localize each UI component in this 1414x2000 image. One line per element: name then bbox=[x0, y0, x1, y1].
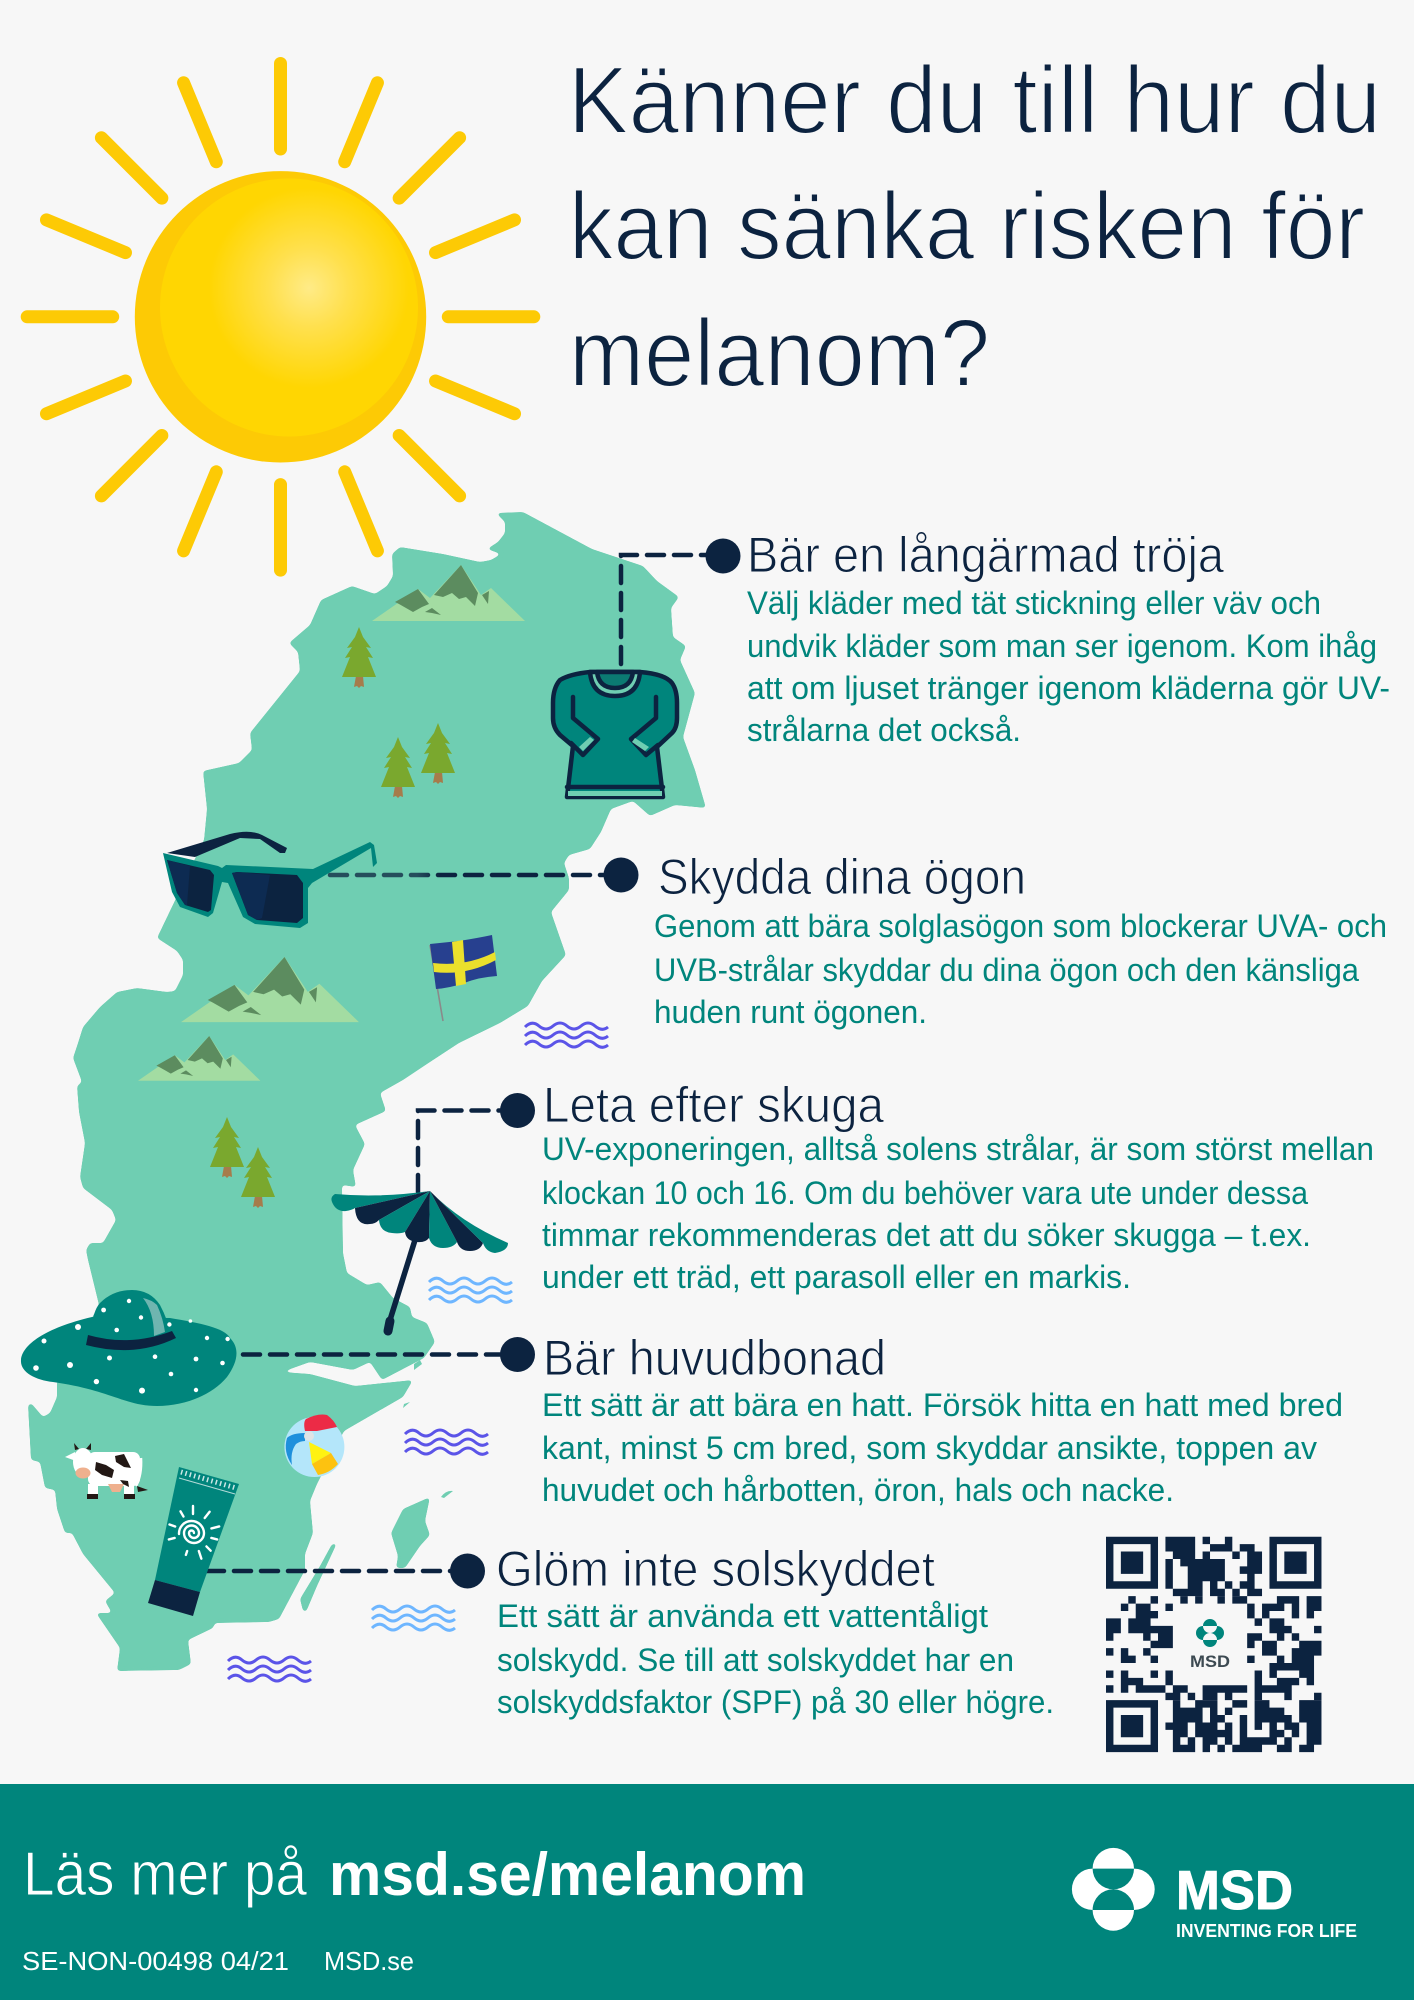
QR code bbox=[1106, 1537, 1321, 1752]
MSD logo bbox=[1072, 1848, 1357, 1941]
tip: seek shade: under ett träd, ett parasoll eller en markis. bbox=[542, 1259, 1131, 1295]
footer call to action bbox=[23, 1840, 806, 1909]
footer reference code: SE-NON-00498 04/21 bbox=[22, 1946, 289, 1976]
footer reference code bbox=[22, 1946, 414, 1976]
icon: cow bbox=[65, 1443, 148, 1499]
tip: seek shade: timmar rekommenderas det att du söker skugga – t.ex. bbox=[542, 1217, 1311, 1253]
icon: parasol bbox=[331, 1191, 508, 1331]
icon: mountains middle bbox=[181, 957, 359, 1022]
map of Sweden bbox=[28, 512, 706, 1671]
connector: hat bbox=[243, 1352, 515, 1357]
tip: wear a hat: Ett sätt är att bära en hatt. Försök hitta en hatt med bred bbox=[542, 1387, 1343, 1423]
connector: umbrella bbox=[418, 1110, 515, 1192]
icon: tree 2 bbox=[381, 737, 415, 798]
tip: wear a hat: Bär huvudbonad bbox=[543, 1330, 886, 1386]
tip: sunscreen: Ett sätt är använda ett vattentåligt bbox=[497, 1598, 988, 1634]
icon: tree 3 bbox=[421, 723, 455, 784]
tip: long sleeved shirt: Välj kläder med tät stickning eller väv och bbox=[747, 585, 1321, 621]
footer call to action: Läs mer på bbox=[23, 1840, 307, 1909]
icon: mountains south bbox=[138, 1036, 260, 1081]
tip: long sleeved shirt bbox=[747, 527, 1390, 748]
tip: protect eyes bbox=[654, 849, 1387, 1030]
icon: waves purple 1 bbox=[525, 1023, 608, 1047]
tip: long sleeved shirt: att om ljuset tränger igenom kläderna gör UV- bbox=[747, 670, 1390, 706]
MSD logo inside QR: MSD bbox=[1190, 1652, 1230, 1671]
shadow over glasses connector bbox=[325, 870, 440, 880]
MSD logo: MSD bbox=[1176, 1859, 1293, 1921]
tip: seek shade: UV-exponeringen, alltså solens strålar, är som störst mellan bbox=[542, 1131, 1374, 1167]
icon: waves purple 3 bbox=[228, 1657, 311, 1681]
tip: sunscreen bbox=[496, 1541, 1054, 1720]
tip: sunscreen: Glöm inte solskyddet bbox=[496, 1541, 935, 1597]
connector: shirt bbox=[621, 555, 720, 664]
marker dot 2 bbox=[604, 858, 638, 892]
tip: seek shade bbox=[542, 1077, 1374, 1295]
icon: waves blue 2 bbox=[372, 1606, 455, 1630]
title: kan sänka risken för bbox=[569, 173, 1365, 280]
tip: protect eyes: UVB-strålar skyddar du dina ögon och den känsliga bbox=[654, 952, 1359, 988]
footer call to action: msd.se/melanom bbox=[329, 1841, 806, 1908]
footer reference code: MSD.se bbox=[324, 1946, 414, 1976]
tip: protect eyes: Genom att bära solglasögon som blockerar UVA- och bbox=[654, 908, 1387, 944]
icon: mountains north bbox=[372, 565, 525, 621]
tip: protect eyes: Skydda dina ögon bbox=[658, 849, 1026, 905]
title: melanom? bbox=[569, 300, 990, 407]
tip: long sleeved shirt: strålarna det också. bbox=[747, 712, 1021, 748]
MSD logo: INVENTING FOR LIFE bbox=[1176, 1921, 1357, 1941]
MSD logo inside QR bbox=[1190, 1619, 1230, 1671]
icon: sun hat bbox=[21, 1290, 236, 1406]
icon: waves blue 1 bbox=[429, 1278, 512, 1302]
icon: sunscreen tube bbox=[148, 1467, 239, 1616]
sun mark on tube bbox=[169, 1506, 219, 1559]
tip: sunscreen: solskyddsfaktor (SPF) på 30 eller högre. bbox=[497, 1684, 1054, 1720]
tip: long sleeved shirt: Bär en långärmad tröja bbox=[747, 527, 1224, 583]
icon: Swedish flag bbox=[430, 935, 497, 1021]
tip: wear a hat: huvudet och hårbotten, öron, hals och nacke. bbox=[542, 1472, 1174, 1508]
small islands bbox=[403, 1360, 453, 1498]
icon: sun bbox=[27, 64, 534, 570]
tip: long sleeved shirt: undvik kläder som man ser igenom. Kom ihåg bbox=[747, 628, 1377, 664]
connector: sunscreen bbox=[207, 1569, 465, 1573]
connector: glasses bbox=[330, 873, 620, 877]
icon: tree 1 bbox=[342, 627, 376, 688]
tip: sunscreen: solskydd. Se till att solskyddet har en bbox=[497, 1642, 1014, 1678]
marker dot 1 bbox=[706, 538, 740, 574]
icon: long sleeved shirt bbox=[553, 672, 677, 797]
tip: seek shade: klockan 10 och 16. Om du behöver vara ute under dessa bbox=[542, 1175, 1308, 1211]
marker dot 4 bbox=[500, 1337, 535, 1372]
icon: waves purple 2 bbox=[405, 1430, 488, 1454]
icon: beach ball bbox=[284, 1414, 344, 1477]
marker dot 5 bbox=[450, 1554, 485, 1588]
marker dot 3 bbox=[500, 1093, 535, 1128]
icon: tree 4 bbox=[210, 1117, 244, 1178]
icon: tree 5 bbox=[241, 1147, 275, 1208]
tip: wear a hat: kant, minst 5 cm bred, som skyddar ansikte, toppen av bbox=[542, 1430, 1317, 1466]
tip: seek shade: Leta efter skuga bbox=[543, 1077, 884, 1133]
tip: wear a hat bbox=[542, 1330, 1343, 1508]
icon: sunglasses bbox=[163, 832, 377, 928]
footer band bbox=[0, 1784, 1414, 2000]
title: Känner du till hur du bbox=[568, 47, 1381, 154]
title bbox=[568, 47, 1381, 407]
tip: protect eyes: huden runt ögonen. bbox=[654, 994, 927, 1030]
